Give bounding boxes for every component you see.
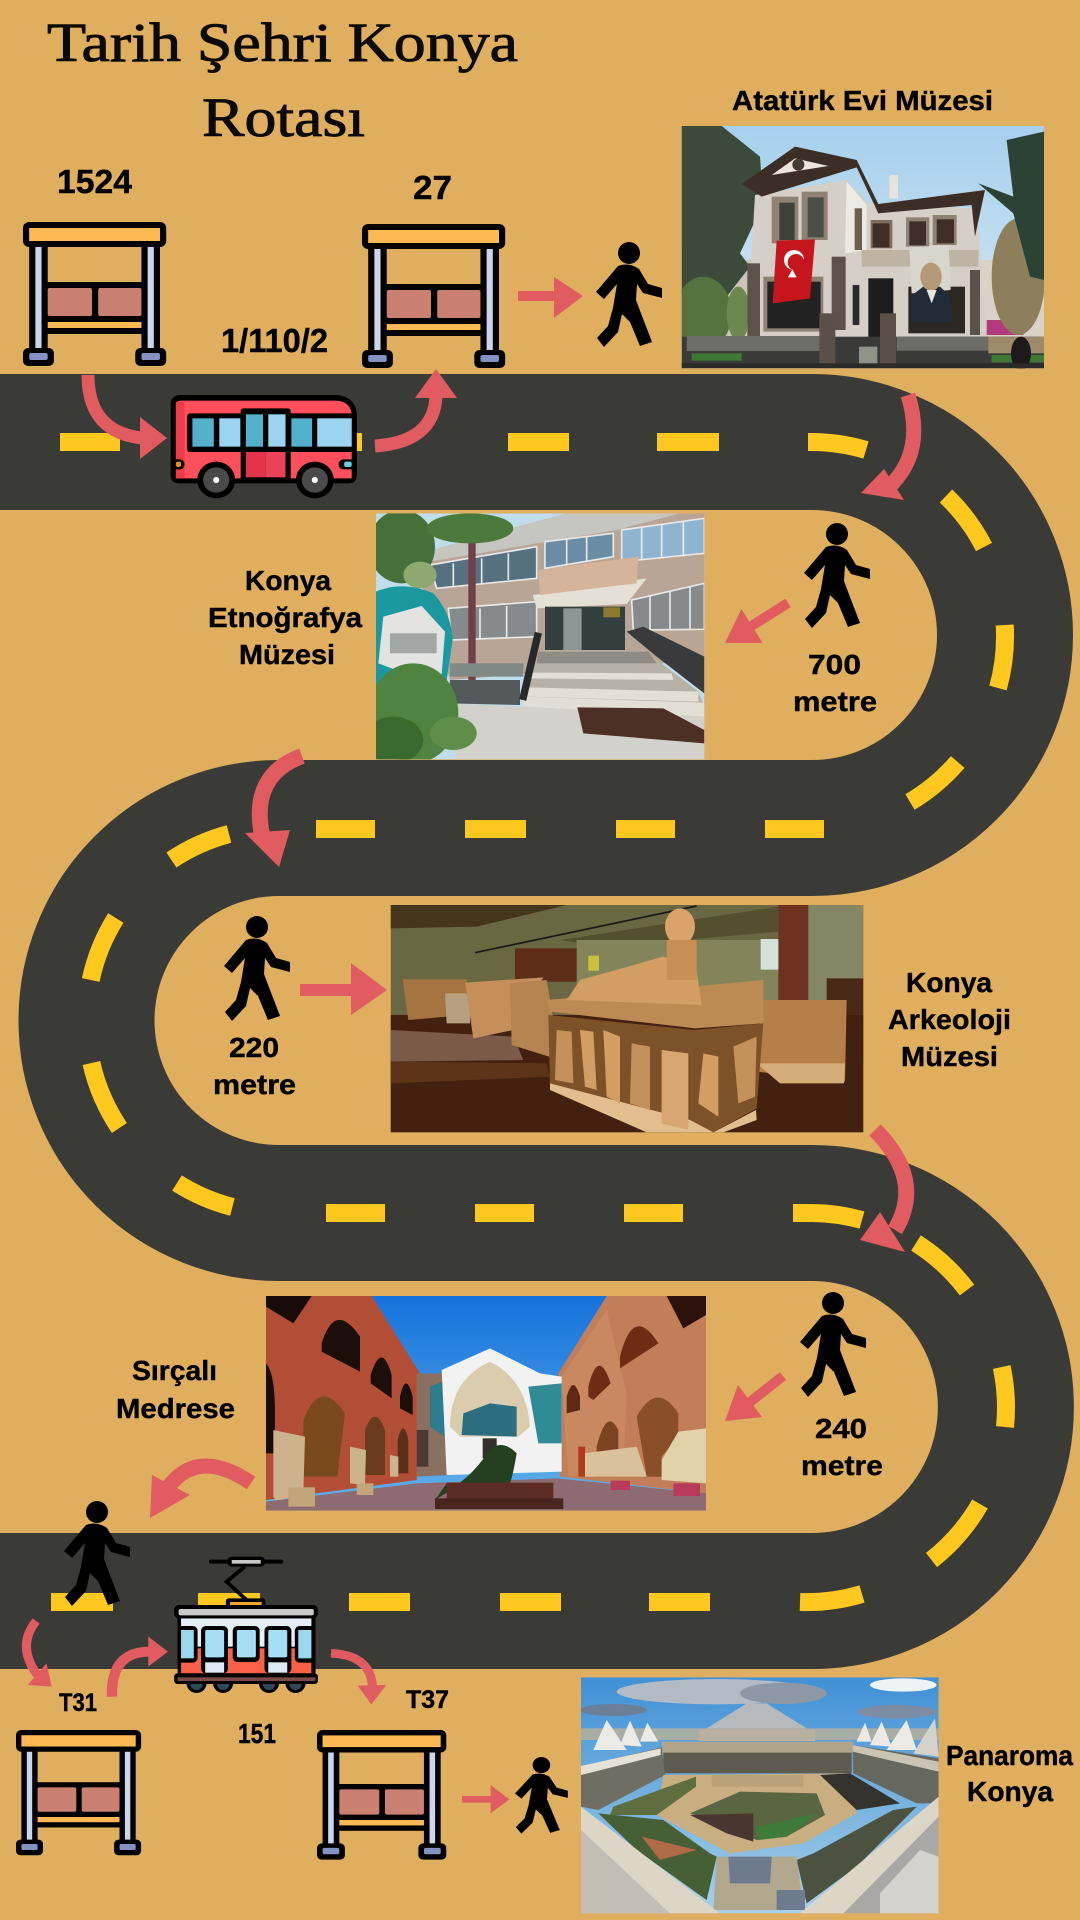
icon: walker to Panorama	[515, 1757, 568, 1834]
arrow: tram to stop T37	[331, 1653, 386, 1704]
arrow: road to walker 240	[860, 1130, 906, 1252]
icon: bus stop 27	[362, 224, 505, 368]
arrow: Sırçalı to walker	[150, 1466, 251, 1518]
stop label 27: 27	[413, 169, 452, 206]
icon: bus stop T37	[317, 1730, 446, 1860]
icon: walker on road	[64, 1501, 130, 1606]
arrow: stop T31 to tram	[112, 1637, 168, 1697]
label: Sırçalı Medrese: Medrese	[116, 1393, 235, 1424]
label: 700 metre: 700	[808, 649, 861, 680]
label: Panaroma Konya: Panaroma	[946, 1740, 1073, 1771]
tram pantograph	[211, 1557, 281, 1608]
label: 220 metre: 220	[229, 1032, 279, 1063]
label: 220 metre: metre	[213, 1069, 296, 1100]
photo: Panorama Konya	[580, 1677, 939, 1913]
photo: Konya Etnoğrafya Müzesi	[363, 510, 704, 763]
label: Konya Arkeoloji Müzesi: Arkeoloji	[888, 1004, 1011, 1035]
label: Sırçalı Medrese: Sırçalı	[132, 1355, 217, 1386]
arrow: walker to Etnografya	[725, 603, 788, 643]
label: Konya Etnoğrafya Müzesi: Müzesi	[239, 639, 335, 670]
label: 240 metre: 240	[815, 1413, 867, 1444]
icon: walker to Atatürk	[596, 242, 662, 347]
photo: Atatürk Evi	[675, 126, 1045, 370]
arrow: road to walker	[861, 395, 914, 500]
icon: tram and arrows	[26, 1557, 509, 1813]
title	[47, 12, 518, 148]
label: Sırçalı Medrese	[116, 1355, 235, 1424]
label: Konya Arkeoloji Müzesi	[888, 967, 1011, 1072]
arrow: stop T37 to walker	[462, 1785, 509, 1813]
road	[0, 442, 1006, 1602]
icon: walker to Etnografya	[804, 523, 870, 628]
icon: bus stop T31	[16, 1730, 141, 1855]
arrow: bus to stop	[375, 369, 457, 446]
label: 240 metre: metre	[801, 1450, 883, 1481]
label: Konya Etnoğrafya Müzesi: Etnoğrafya	[208, 602, 362, 633]
icon: bus stop 1524	[23, 222, 166, 366]
label: Panaroma Konya	[946, 1740, 1073, 1807]
photo: Sırçalı Medrese	[266, 1296, 706, 1511]
photo: Konya Arkeoloji Müzesi	[391, 905, 863, 1132]
label: Panaroma Konya: Konya	[967, 1776, 1053, 1807]
arrow: stop to bus	[88, 375, 167, 459]
icon: walker to Sırçalı	[800, 1292, 866, 1397]
label: 240 metre	[801, 1413, 883, 1481]
label: 151: 151	[238, 1718, 276, 1749]
label: Konya Etnoğrafya Müzesi: Konya	[245, 565, 331, 596]
label: 700 metre: metre	[793, 686, 877, 717]
arrow: walker to Sırçalı	[725, 1376, 783, 1421]
tram body	[174, 1605, 318, 1693]
label: Konya Arkeoloji Müzesi: Müzesi	[901, 1041, 998, 1072]
icon: walker to Arkeoloji	[224, 916, 290, 1021]
arrow: walker to stop T31	[26, 1621, 52, 1687]
label: Konya Arkeoloji Müzesi: Konya	[906, 967, 992, 998]
icon: red bus	[171, 395, 357, 498]
stop label 1524: 1524	[57, 163, 133, 200]
arrow: walker to Arkeoloji	[300, 963, 387, 1015]
label: Atatürk Evi Müzesi: Atatürk Evi Müzesi	[732, 85, 993, 116]
bus lines label: 1/110/2	[221, 322, 328, 359]
label: T31: T31	[59, 1689, 97, 1717]
title: Tarih Şehri Konya	[47, 12, 518, 73]
label: T37: T37	[406, 1686, 449, 1714]
arrow: road to walker 220	[245, 756, 302, 867]
label: 700 metre	[793, 649, 877, 717]
title: Rotası	[202, 87, 365, 148]
arrow: stop to walker	[518, 277, 583, 318]
label: Konya Etnoğrafya Müzesi	[208, 565, 362, 670]
label: 220 metre	[213, 1032, 296, 1100]
